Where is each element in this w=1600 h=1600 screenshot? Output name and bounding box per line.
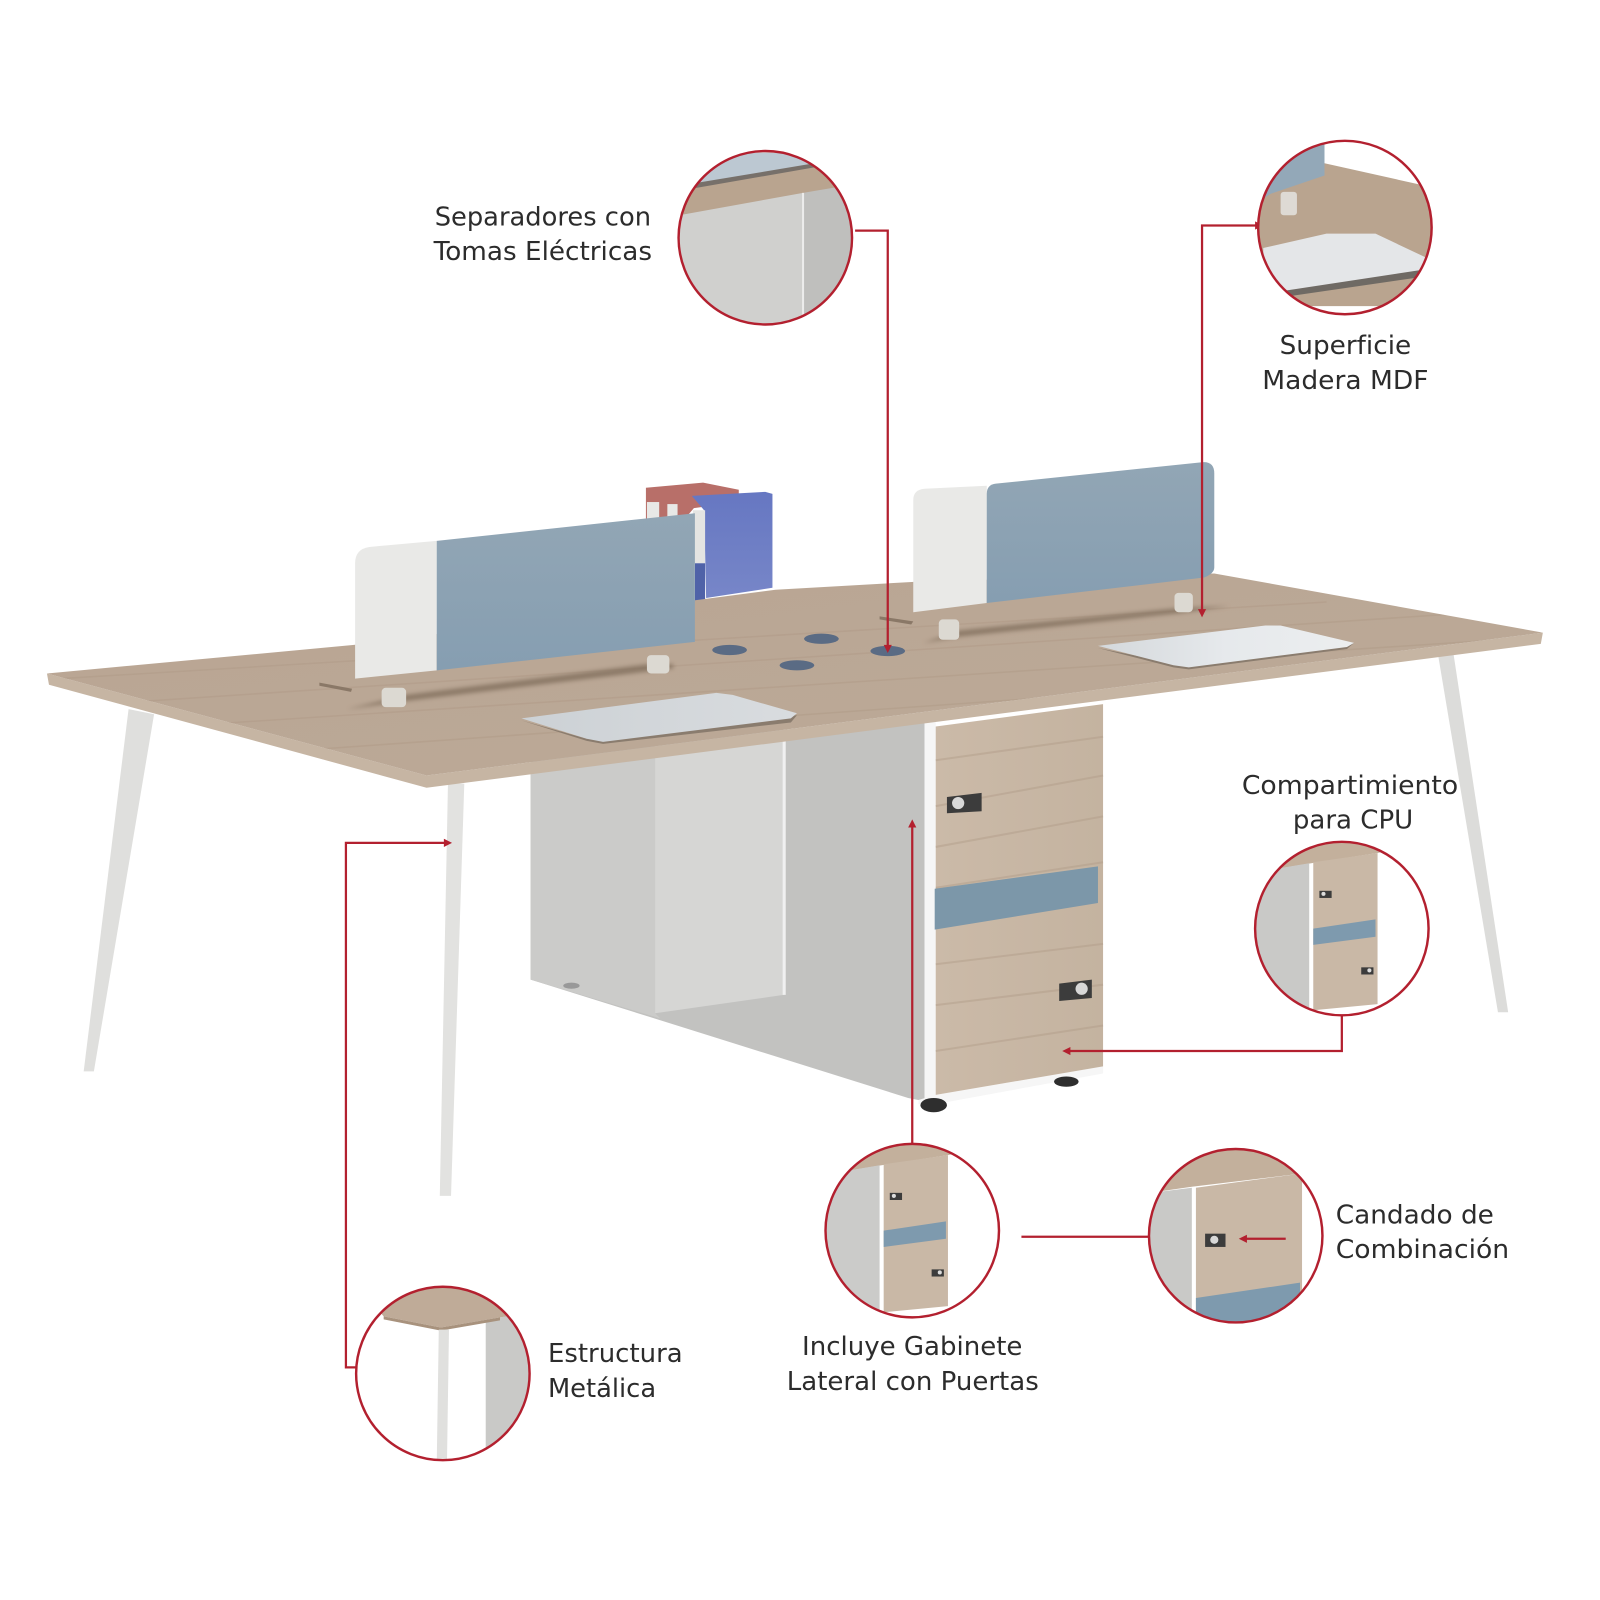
desktop surface [47,573,1543,776]
callout circle: separadores [673,148,857,332]
desktop edge [47,633,1543,788]
arrow: candado [1239,1235,1286,1243]
label: estructura: Metálica [548,1374,656,1404]
label: gabinete: Incluye Gabinete [802,1332,1022,1362]
label: candado [1336,1200,1509,1265]
label: separadores: Tomas Eléctricas [433,237,652,267]
cabinet feet [563,983,1079,1112]
label: superficie [1262,331,1429,396]
connector: candado [1021,1236,1149,1238]
under-desk cabinet body [531,714,1103,1104]
desk leg: right [1438,651,1508,1012]
divider: left [355,513,695,679]
desk illustration [47,462,1543,1196]
desk leg: front [440,784,464,1196]
label: compartimiento: para CPU [1293,806,1413,836]
label: gabinete: Lateral con Puertas [787,1367,1039,1397]
label: compartimiento [1242,771,1458,836]
label: gabinete [787,1332,1039,1397]
desk pad: left [521,693,797,744]
label: compartimiento: Compartimiento [1242,771,1458,801]
label: estructura: Estructura [548,1339,683,1369]
callout circle: gabinete [821,1139,1005,1322]
connector: superficie [1198,221,1263,617]
desk leg: back left [84,709,154,1071]
label: superficie: Madera MDF [1262,366,1429,396]
callout circle: candado [1143,1143,1327,1327]
connector: estructura [346,839,452,1367]
label: candado: Candado de [1336,1200,1494,1230]
binders [646,483,772,632]
grommets [712,634,905,670]
divider supports [382,593,1193,707]
label: estructura [548,1339,683,1404]
divider: right [913,462,1214,612]
desk pad: right [1098,626,1354,669]
connector: compartimiento [1062,1015,1342,1055]
label: candado: Combinación [1336,1235,1509,1265]
cabinet door [935,704,1103,1095]
connector: separadores [855,231,892,653]
connector: gabinete [908,819,916,1144]
label: separadores [433,203,652,267]
label: superficie: Superficie [1280,331,1411,361]
callout circle: superficie [1255,138,1439,321]
cable trough shadows [319,606,1230,709]
callout circle: estructura [352,1281,536,1464]
callout circle: compartimiento [1250,837,1434,1020]
label: separadores: Separadores con [435,203,651,233]
